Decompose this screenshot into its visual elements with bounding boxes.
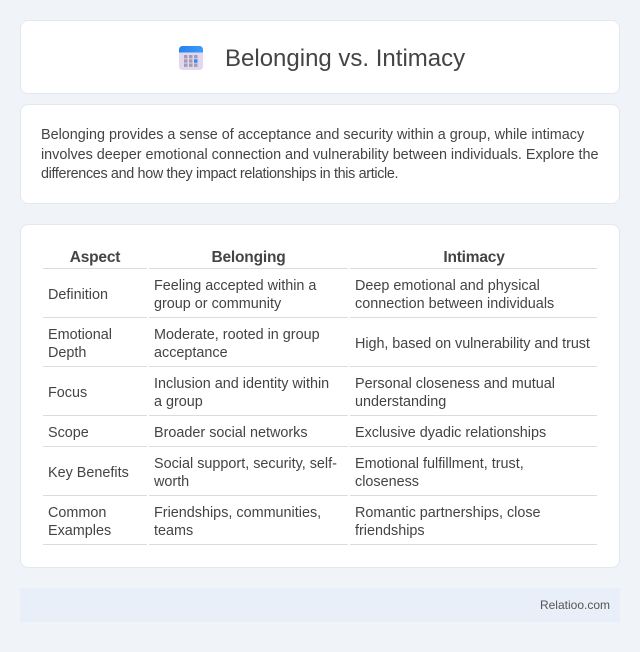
Emotional Depth: Belonging: acceptance [154, 345, 228, 361]
Key Benefits: Belonging [154, 456, 337, 490]
Common Examples: Belonging [154, 505, 321, 539]
Focus: Belonging [154, 376, 329, 410]
intro text [41, 127, 598, 182]
footer bar [20, 588, 620, 622]
Definition: Belonging [154, 278, 316, 312]
Focus: Intimacy: understanding [355, 394, 446, 410]
row: Emotional Depth: Depth [48, 345, 86, 361]
heading: Belonging: Belonging [212, 249, 285, 266]
Common Examples: Belonging: Friendships, communities, [154, 505, 321, 521]
Common Examples: Intimacy: Romantic partnerships, close [355, 505, 541, 521]
panel: title header [20, 20, 620, 94]
Focus: Belonging: a group [154, 394, 203, 410]
Focus: Intimacy: Personal closeness and mutual [355, 376, 555, 392]
Common Examples: Intimacy: friendships [355, 523, 425, 539]
Scope: Belonging: Broader social networks [154, 425, 308, 441]
Key Benefits: Intimacy [355, 456, 524, 490]
footer text: Relatioo.com [540, 598, 610, 612]
intro text: differences and how they impact relationships in this article. [41, 166, 398, 182]
Key Benefits: Belonging: Social support, security, self- [154, 456, 337, 472]
Key Benefits: Belonging: worth [154, 474, 189, 490]
intro text: Belonging provides a sense of acceptance and security within a group, while intimacy [41, 127, 584, 143]
row: Common Examples [48, 505, 111, 539]
row: Scope: Scope [48, 425, 89, 441]
panel: comparison table [20, 224, 620, 568]
row: Key Benefits: Key Benefits [48, 465, 129, 481]
Definition: Intimacy [355, 278, 554, 312]
Definition: Belonging: Feeling accepted within a [154, 278, 316, 294]
Definition: Intimacy: Deep emotional and physical [355, 278, 540, 294]
row: Emotional Depth: Emotional [48, 327, 112, 343]
title: Belonging vs. Intimacy [225, 45, 465, 72]
Focus: Intimacy [355, 376, 555, 410]
Definition: Belonging: group or community [154, 296, 281, 312]
icon: calendar [179, 46, 203, 70]
heading: Intimacy: Intimacy [443, 249, 505, 266]
Definition: Intimacy: connection between individuals [355, 296, 554, 312]
Key Benefits: Intimacy: Emotional fulfillment, trust, [355, 456, 524, 472]
Emotional Depth: Belonging [154, 327, 320, 361]
Common Examples: Intimacy [355, 505, 541, 539]
row: Definition: Definition [48, 287, 108, 303]
heading: Aspect: Aspect [70, 249, 120, 266]
panel: introduction [20, 104, 620, 204]
Scope: Intimacy: Exclusive dyadic relationships [355, 425, 546, 441]
Focus: Belonging: Inclusion and identity within [154, 376, 329, 392]
row: Focus: Focus [48, 385, 87, 401]
intro text: involves deeper emotional connection and vulnerability between individuals. Explore the [41, 146, 598, 162]
Common Examples: Belonging: teams [154, 523, 193, 539]
Key Benefits: Intimacy: closeness [355, 474, 419, 490]
row: Common Examples: Examples [48, 523, 111, 539]
row: Common Examples: Common [48, 505, 106, 521]
Emotional Depth: Belonging: Moderate, rooted in group [154, 327, 320, 343]
row: Emotional Depth [48, 327, 112, 361]
Emotional Depth: Intimacy: High, based on vulnerability and trust [355, 336, 590, 352]
